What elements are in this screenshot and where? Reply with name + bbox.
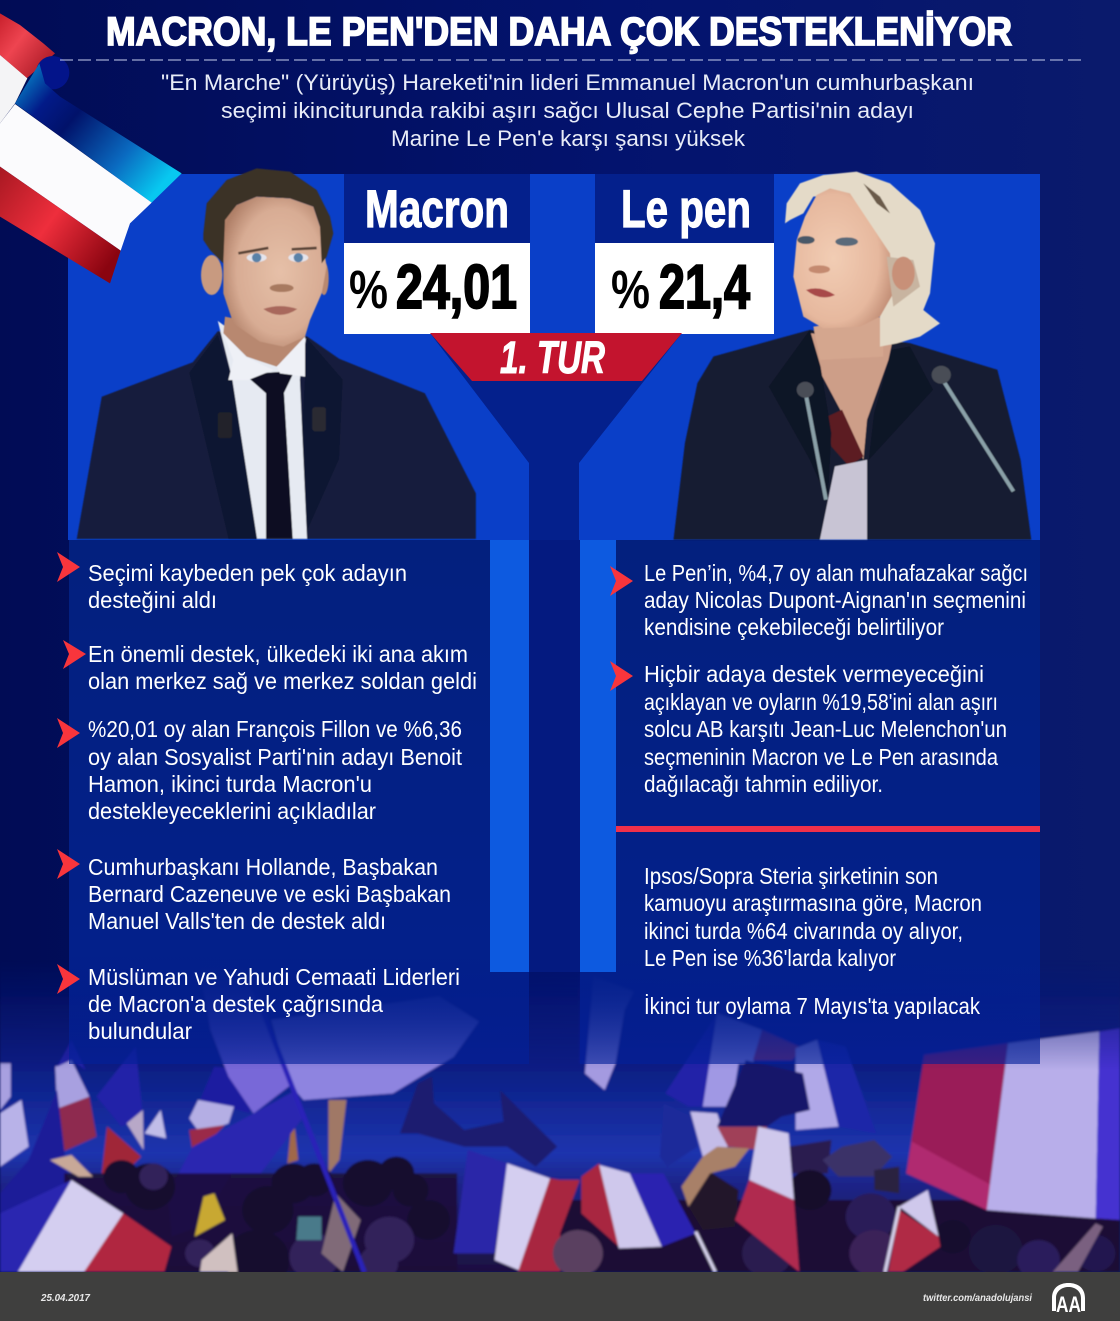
text block: right column bullets: seçmeninin Macron ve Le Pen arasında (644, 744, 998, 770)
text block: right column bullets: kendisine çekebileceği belirtiliyor (644, 614, 944, 640)
text block: right column bullets: Hiçbir adaya destek vermeyeceğini (644, 661, 984, 687)
text block: left column bullets: destekleyeceklerini açıkladılar (88, 798, 376, 824)
photo: Marine Le Pen (674, 172, 1031, 540)
bullet arrows: right column (610, 566, 633, 691)
text block: right column bullets: Le Pen’in, %4,7 oy alan muhafazakar sağcı (644, 560, 1028, 586)
round banner: 1. TUR (430, 332, 682, 383)
text block: left column bullets: desteğini aldı (88, 587, 217, 613)
text block: left column bullets: Bernard Cazeneuve ve eski Başbakan (88, 881, 451, 907)
text block: left column bullets: Manuel Valls'ten de destek aldı (88, 908, 386, 934)
light blue strip: right (580, 540, 616, 972)
text panel: right (580, 540, 1040, 1064)
text block: left column bullets: de Macron'a destek çağrısında (88, 991, 383, 1017)
icon: Anadolu Agency logo: AA (1056, 1292, 1081, 1317)
title: MACRON, LE PEN'DEN DAHA ÇOK DESTEKLENİYOR (106, 10, 1012, 54)
footer date: 25.04.2017 (40, 1293, 90, 1304)
main blue backdrop (68, 174, 1040, 540)
text block: poll results: kamuoyu araştırmasına göre, Macron (644, 890, 982, 916)
funnel stem (430, 333, 682, 540)
text block: left column bullets (88, 560, 477, 1044)
Le Pen result box (595, 174, 774, 334)
text block: left column bullets: olan merkez sağ ve merkez soldan geldi (88, 668, 477, 694)
center column (529, 540, 580, 972)
text block: right column bullets: aday Nicolas Dupont-Aignan'ın seçmenini (644, 587, 1026, 613)
icon: Anadolu Agency logo (1052, 1283, 1085, 1317)
footer bar (0, 1272, 1120, 1321)
crowd photo with flags (0, 983, 1120, 1272)
text block: left column bullets: Müslüman ve Yahudi Cemaati Liderleri (88, 964, 460, 990)
Le Pen result box: 21,4 (659, 253, 750, 322)
footer source: twitter.com/anadolujansi (923, 1293, 1032, 1304)
subtitle (161, 70, 974, 151)
subtitle: "En Marche" (Yürüyüş) Hareketi'nin lideri Emmanuel Macron'un cumhurbaşkanı (161, 70, 974, 95)
text block: left column bullets: Hamon, ikinci turda Macron'u (88, 771, 372, 797)
text block: poll results: Ipsos/Sopra Steria şirketinin son (644, 863, 938, 889)
text block: poll results: Le Pen ise %36'larda kalıyor (644, 945, 896, 971)
round banner: 1. TUR: 1. TUR (500, 332, 605, 383)
dashed divider (60, 59, 1082, 61)
Macron result box: 24,01 (396, 253, 517, 322)
text block: left column bullets: Seçimi kaybeden pek çok adayın (88, 560, 407, 586)
text block: right column bullets (644, 560, 1028, 797)
bullet arrows: left column (57, 552, 86, 994)
text block: left column bullets: %20,01 oy alan François Fillon ve %6,36 (88, 716, 462, 742)
Le Pen result box: Le pen (621, 180, 751, 239)
light blue strip: left (490, 540, 529, 972)
text block: poll results: İkinci tur oylama 7 Mayıs'ta yapılacak (644, 993, 980, 1019)
text block: left column bullets: oy alan Sosyalist Parti'nin adayı Benoit (88, 744, 463, 770)
text block: right column bullets: açıklayan ve oyların %19,58'ini alan aşırı (644, 689, 998, 715)
text block: right column bullets: dağılacağı tahmin ediliyor. (644, 771, 883, 797)
red divider (616, 826, 1040, 832)
Macron result box (344, 174, 530, 334)
text block: poll results (644, 863, 982, 1019)
photo: Emmanuel Macron (77, 168, 476, 539)
text block: left column bullets: bulundular (88, 1018, 192, 1044)
text panel: left (69, 540, 529, 1064)
text block: left column bullets: Cumhurbaşkanı Hollande, Başbakan (88, 854, 438, 880)
Macron result box: % (349, 260, 388, 320)
Le Pen result box: % (611, 260, 650, 320)
text block: left column bullets: En önemli destek, ülkedeki iki ana akım (88, 641, 468, 667)
text block: poll results: ikinci turda %64 civarında oy alıyor, (644, 918, 963, 944)
subtitle: seçimi ikinciturunda rakibi aşırı sağcı Ulusal Cephe Partisi'nin adayı (221, 98, 914, 123)
subtitle: Marine Le Pen'e karşı şansı yüksek (391, 126, 746, 151)
text block: right column bullets: solcu AB karşıtı Jean-Luc Melenchon'un (644, 716, 1007, 742)
ribbon: French flag (0, 13, 182, 283)
Macron result box: Macron (365, 180, 509, 239)
